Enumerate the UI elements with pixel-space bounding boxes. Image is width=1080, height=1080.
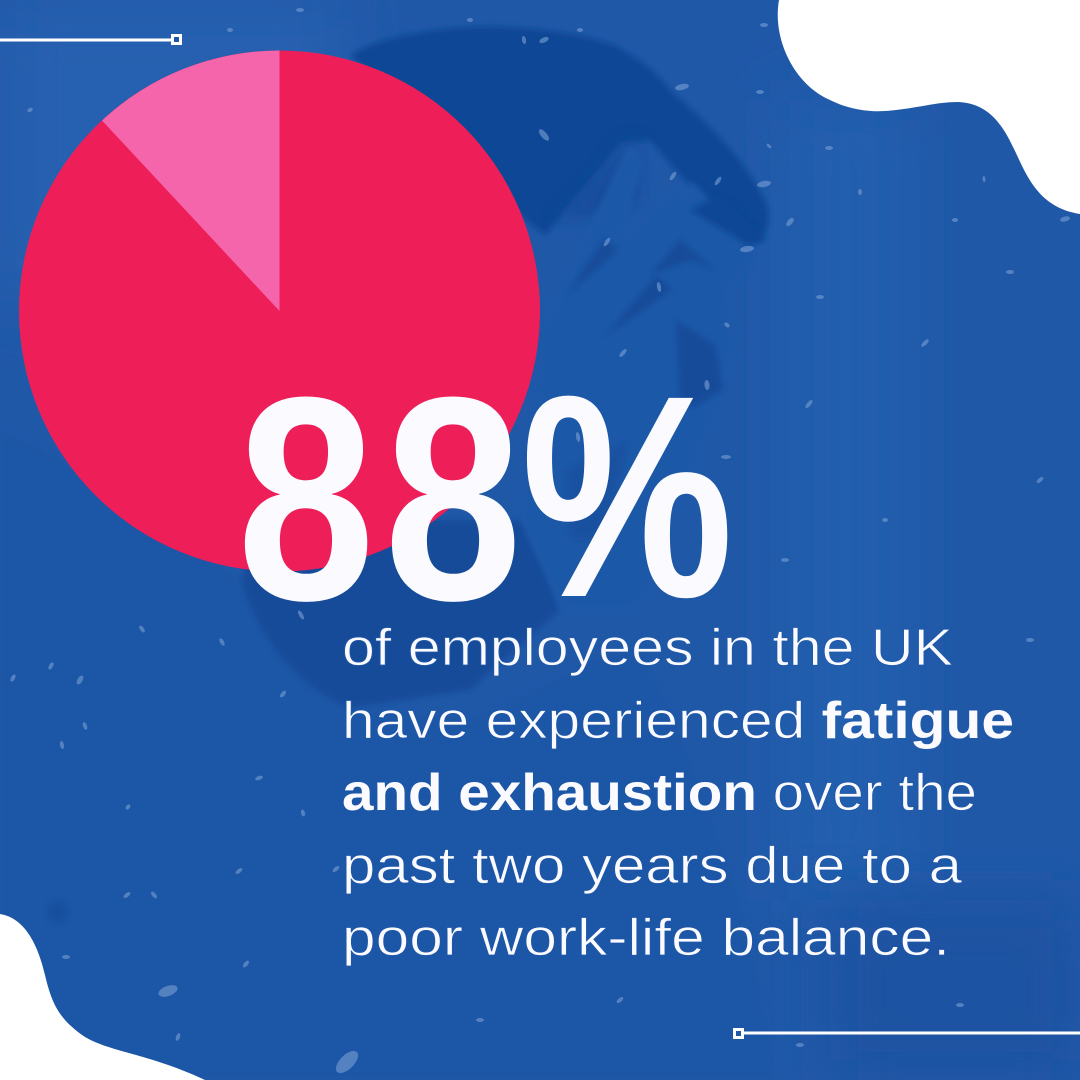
description text: of employees in the UK — [342, 619, 953, 677]
sweater button — [47, 901, 69, 923]
description text: past two years due to a — [342, 837, 962, 895]
hair — [350, 27, 768, 243]
sweater — [0, 430, 775, 1080]
hand — [520, 147, 755, 610]
decorative connector: top left — [0, 36, 180, 44]
finger shadows — [565, 238, 723, 540]
neck shadow — [242, 520, 560, 708]
description text: and exhaustion over the — [342, 764, 977, 822]
big statistic: 88% — [237, 336, 734, 661]
description text — [342, 619, 1014, 967]
big statistic: 88%: 88 — [237, 338, 522, 661]
decorative connector: bottom right — [734, 1030, 1080, 1038]
description text: poor work-life balance. — [342, 909, 950, 967]
pie slice: remaining 12 percent — [102, 50, 280, 311]
white blob: bottom left — [0, 914, 205, 1080]
pie chart: 88 percent — [19, 50, 540, 572]
description text: have experienced fatigue — [342, 692, 1014, 750]
big statistic: 88%: % — [521, 336, 734, 658]
white blob: top right — [778, 0, 1080, 214]
